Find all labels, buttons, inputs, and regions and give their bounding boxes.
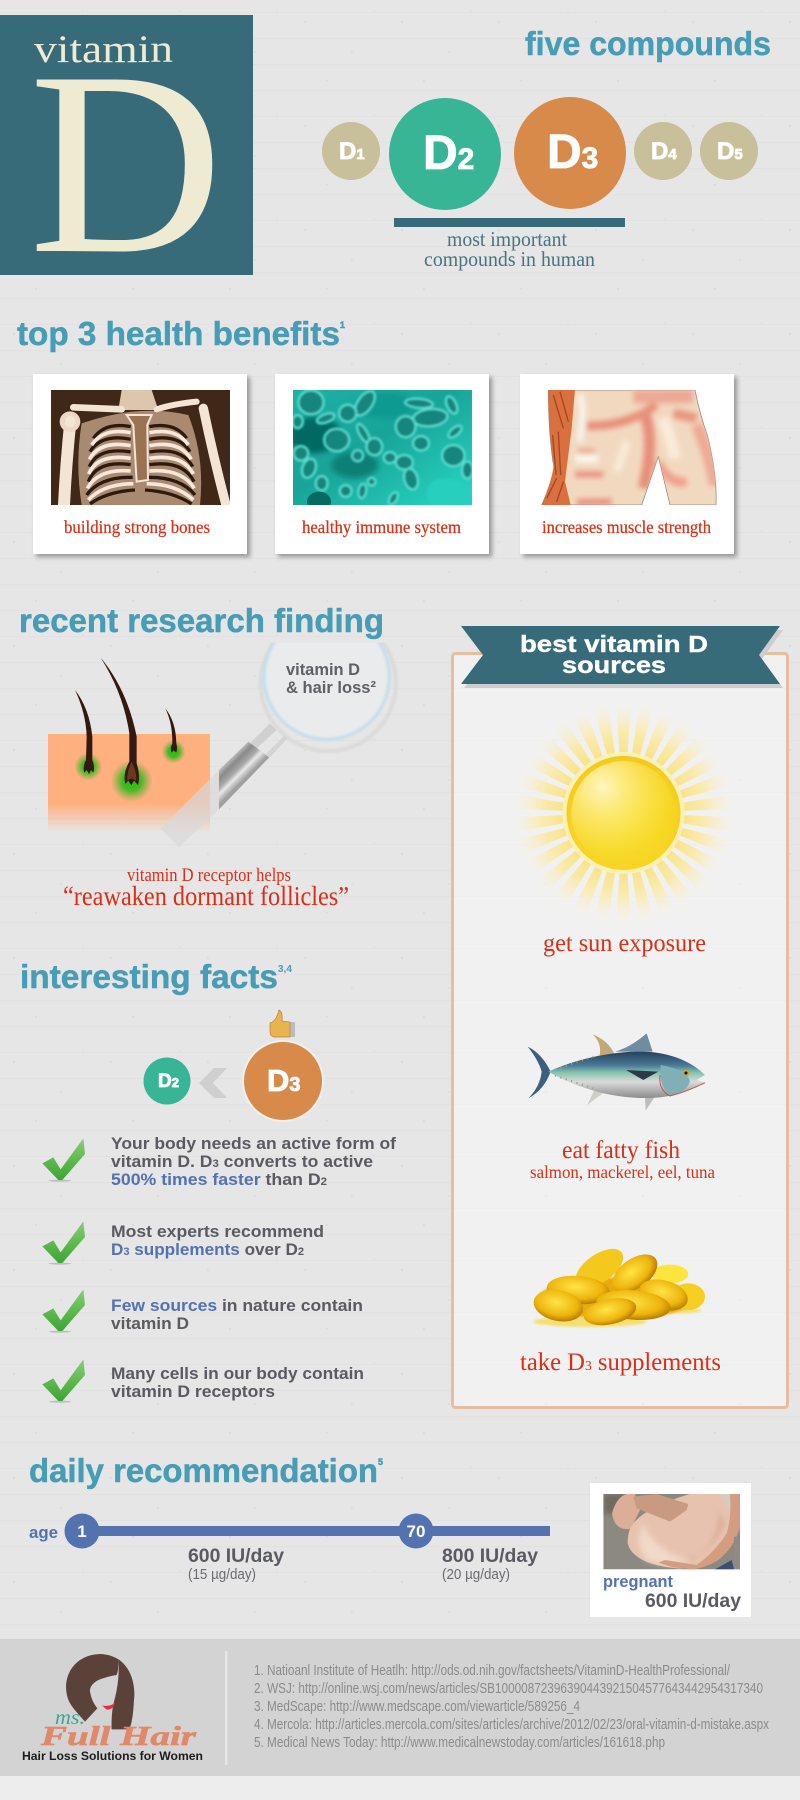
circle D3: D3	[267, 1063, 301, 1098]
dose after age 70	[442, 1546, 538, 1583]
fact 3	[42, 1289, 363, 1333]
dose: 600 IU/day	[645, 1591, 741, 1612]
circle D4	[634, 122, 692, 180]
title block: vitamin D: vitamin	[34, 28, 173, 71]
bottom strip	[0, 1776, 800, 1800]
dose to age 70: 600 IU/day	[188, 1546, 284, 1567]
follicle glows	[74, 740, 186, 802]
heading: top 3 health benefits: top 3 health benefits	[17, 315, 338, 352]
icon: check	[42, 1138, 85, 1182]
magnifier label: vitamin D	[286, 661, 360, 679]
circle D5	[700, 122, 758, 180]
heading: top 3 health benefits: 1	[340, 320, 345, 330]
marker age 1: 1	[77, 1522, 87, 1541]
skin cross-section with hair follicles	[48, 658, 219, 847]
caption: healthy immune system	[302, 517, 461, 537]
icon: check	[42, 1289, 85, 1333]
circle D2	[389, 98, 501, 210]
dose to age 70	[188, 1546, 284, 1583]
card: pregnant	[590, 1483, 751, 1617]
caption: fish	[530, 1135, 715, 1182]
bracket bar and caption: compounds in human	[424, 247, 595, 271]
ms.: ms.	[55, 1707, 85, 1729]
circle D2: D2	[423, 127, 474, 180]
fact text: D3 supplements over D2	[111, 1240, 304, 1259]
fact 1	[42, 1134, 396, 1189]
circle D3	[514, 97, 626, 209]
icon: tuna fish	[528, 1033, 705, 1111]
research caption: “reawaken dormant follicles”	[63, 881, 349, 911]
card: muscle strength	[520, 374, 734, 554]
banner: best vitamin D	[520, 631, 708, 657]
references: 3. MedScape: http://www.medscape.com/viewarticle/589256_4	[254, 1699, 580, 1715]
left hair	[75, 690, 94, 774]
heading: five compounds: five compounds	[525, 25, 771, 62]
card: immune system	[275, 374, 489, 554]
fact text: Many cells in our body contain	[111, 1364, 364, 1383]
references	[254, 1663, 770, 1751]
hair illustration	[66, 1654, 134, 1732]
icon: thumbs up	[270, 1010, 295, 1037]
dose after age 70: (20 µg/day)	[442, 1567, 510, 1583]
caption: fish: salmon, mackerel, eel, tuna	[530, 1162, 715, 1182]
fact text: vitamin D	[111, 1314, 189, 1333]
pregnant belly photo	[603, 1494, 740, 1569]
research caption: vitamin D receptor helps	[127, 866, 291, 886]
Full Hair: Full Hair	[40, 1721, 197, 1751]
circle D4: D4	[651, 138, 677, 165]
panel: best vitamin D sources	[452, 626, 788, 1408]
circle D2	[144, 1058, 190, 1104]
circle D3	[242, 1040, 324, 1122]
icon: softgel capsules	[531, 1241, 705, 1330]
caption: increases muscle strength	[542, 517, 711, 537]
fact 4	[42, 1359, 364, 1403]
banner: sources	[562, 652, 666, 678]
circle D2: D2	[158, 1071, 179, 1092]
caption: building strong bones	[64, 517, 210, 537]
icon: check	[42, 1359, 85, 1403]
fact text	[111, 1296, 363, 1333]
references: 5. Medical News Today: http://www.medicalnewstoday.com/articles/161618.php	[254, 1735, 665, 1751]
circle D1	[322, 122, 380, 180]
magnifier label: & hair loss²	[286, 679, 377, 697]
logo: Ms. Full Hair	[22, 1654, 203, 1763]
dose after age 70: 800 IU/day	[442, 1546, 538, 1567]
heading: daily recommendation: daily recommendation	[29, 1452, 379, 1489]
fact text	[111, 1364, 364, 1401]
heading: daily recommendation: 5	[378, 1457, 383, 1467]
bracket bar and caption	[394, 218, 625, 271]
card: strong bones	[33, 374, 247, 554]
heading: interesting facts: 3,4	[278, 964, 292, 975]
fact text: vitamin D receptors	[111, 1382, 275, 1401]
five compound circles	[322, 97, 758, 210]
circle D5: D5	[717, 138, 743, 165]
tagline: Hair Loss Solutions for Women	[22, 1749, 203, 1763]
circle D1: D1	[339, 138, 365, 165]
fact text: Most experts recommend	[111, 1222, 324, 1241]
caption: fish: eat fatty fish	[562, 1135, 680, 1164]
ghost handle	[161, 770, 219, 847]
skeleton image	[51, 390, 230, 505]
banner	[461, 626, 783, 688]
fact text: Few sources in nature contain	[111, 1296, 363, 1315]
fact 2	[42, 1221, 324, 1265]
muscle torso image	[542, 390, 716, 505]
bracket bar and caption: most important	[447, 227, 567, 251]
age timeline	[29, 1514, 550, 1583]
fact text: Your body needs an active form of	[111, 1134, 396, 1153]
arrow chevron	[199, 1068, 227, 1098]
D3 beats D2 diagram	[144, 1040, 324, 1122]
magnifying glass	[219, 614, 396, 809]
marker age 70: 70	[407, 1522, 425, 1541]
icon: check	[42, 1221, 85, 1265]
icon: sun	[511, 701, 736, 925]
heading: recent research finding: recent research finding	[19, 602, 384, 639]
footer	[0, 1639, 800, 1776]
fact text: vitamin D. D 3 converts to active	[111, 1152, 373, 1171]
circle D3: D3	[547, 126, 598, 179]
research caption	[63, 866, 349, 911]
fact text: 500% times faster than D2	[111, 1170, 327, 1189]
centre hair	[101, 658, 139, 785]
caption: sun: get sun exposure	[543, 928, 706, 957]
magnifier label	[286, 661, 377, 697]
blood cells image	[293, 390, 472, 505]
marker age 1	[64, 1514, 100, 1548]
age label: age	[29, 1524, 58, 1542]
marker age 70	[398, 1514, 434, 1548]
heading: interesting facts: interesting facts	[20, 958, 275, 995]
fact text	[111, 1222, 324, 1259]
caption: supplements: take D3 supplements	[520, 1347, 721, 1376]
right hair	[165, 708, 177, 753]
label: pregnant	[603, 1573, 673, 1591]
dose to age 70: (15 µg/day)	[188, 1567, 256, 1583]
fact text	[111, 1134, 396, 1189]
timeline bar	[95, 1526, 550, 1536]
title block: vitamin D: D	[29, 18, 223, 308]
